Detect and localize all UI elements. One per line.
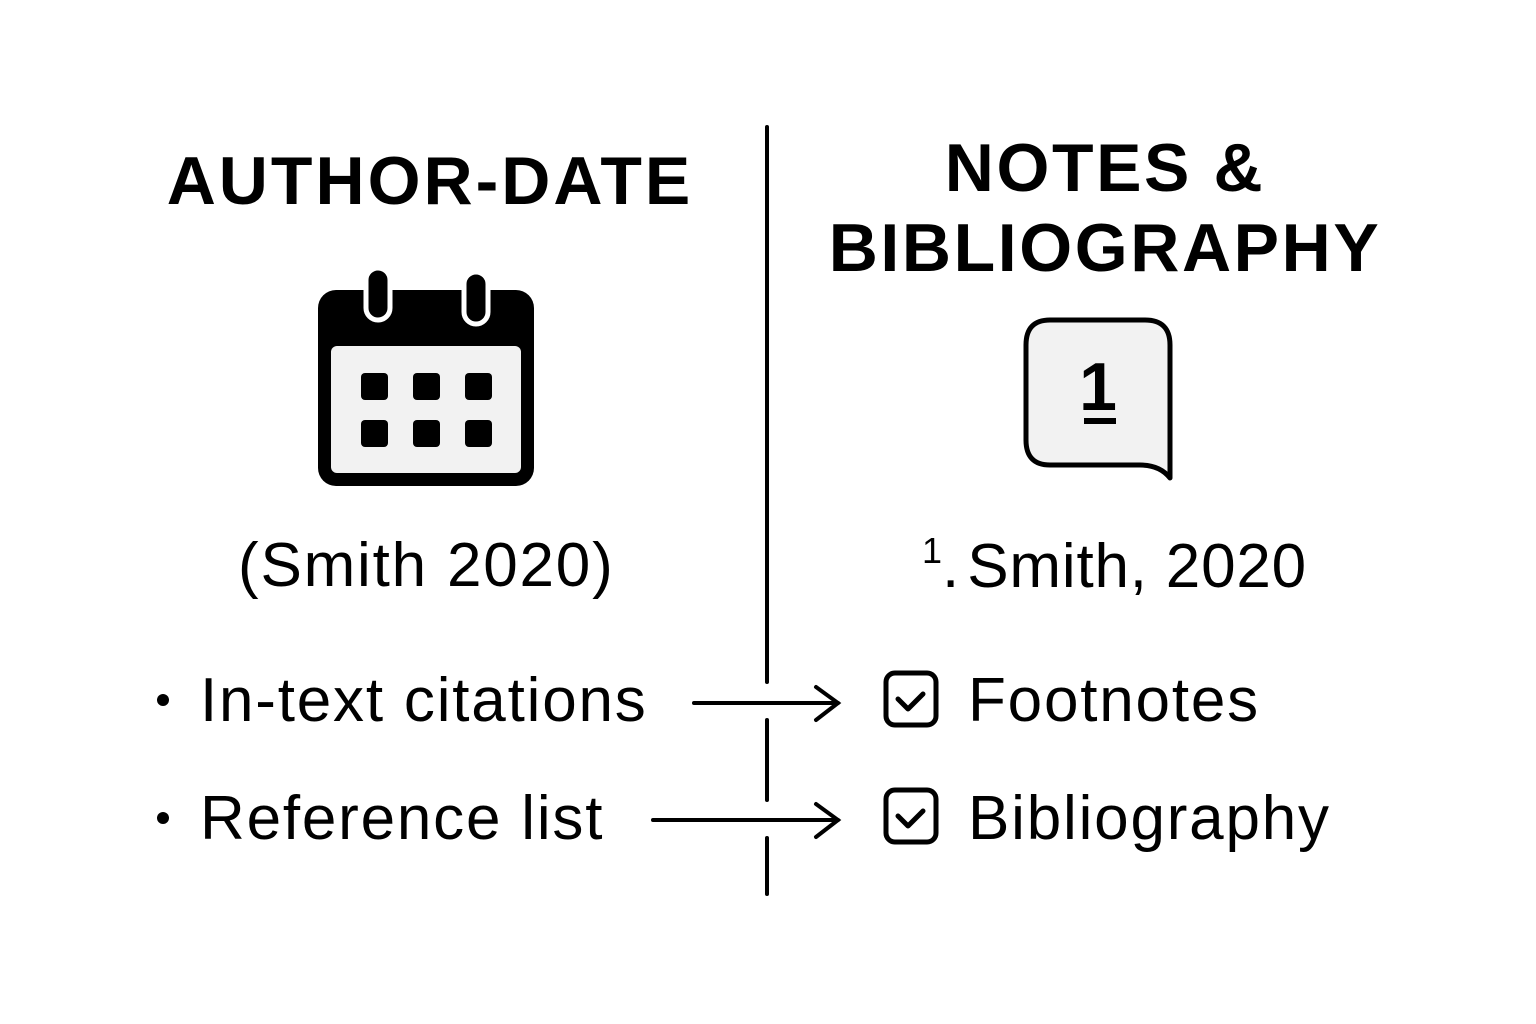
item: footnotes: Footnotes — [968, 666, 1260, 735]
example: author-date citation: (Smith 2020) — [238, 531, 615, 600]
item: bibliography: Bibliography — [968, 784, 1331, 853]
icon: footnote bubble — [1026, 320, 1170, 478]
bullet dots — [157, 694, 169, 824]
icon: checkbox 1 — [886, 673, 936, 725]
heading: notes & bibliography: NOTES & — [945, 130, 1265, 206]
icon: footnote bubble: 1 — [1079, 349, 1117, 425]
heading: notes & bibliography: BIBLIOGRAPHY — [829, 210, 1381, 286]
example: footnote citation: 1.Smith, 2020 — [922, 530, 1307, 601]
bullet: in-text citations: In-text citations — [200, 666, 648, 735]
icon: calendar — [318, 268, 534, 486]
icon: checkbox 2 — [886, 790, 936, 842]
heading: notes & bibliography — [829, 130, 1381, 286]
arrow 2 — [653, 804, 838, 837]
arrow 1 — [694, 687, 838, 720]
heading: author-date: AUTHOR-DATE — [167, 143, 693, 219]
bullet: reference list: Reference list — [200, 784, 604, 853]
